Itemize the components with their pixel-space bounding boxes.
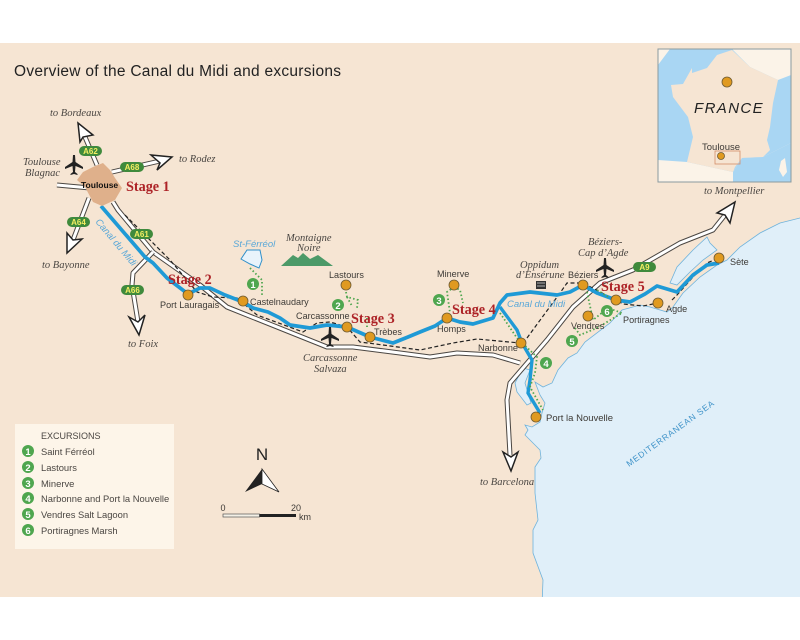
scale bar: 0 (220, 503, 226, 513)
italic destination labels: Montaigne (285, 233, 332, 244)
excursion number badges: 5 (569, 337, 575, 348)
italic destination labels: Noire (296, 243, 321, 254)
italic destination labels: Carcassonne (303, 353, 358, 364)
excursion number badges: 2 (335, 301, 341, 312)
legend: excursions (15, 424, 174, 549)
italic destination labels: Blagnac (25, 168, 60, 179)
italic destination labels: to Rodez (179, 154, 215, 165)
excursion routes (250, 268, 622, 410)
legend: excursions: Minerve (41, 478, 74, 489)
Thau lagoon (670, 237, 717, 285)
place names: Narbonne (478, 343, 518, 353)
place names: Agde (666, 304, 687, 314)
stage labels: Stage 3 (351, 311, 395, 327)
icon: Toulouse Blagnac airport (65, 155, 83, 175)
north arrow (245, 445, 279, 492)
lake Saint Ferreol (241, 250, 262, 268)
stage labels: Stage 2 (168, 272, 212, 288)
icon: Montagne Noire mountains (281, 253, 333, 266)
railway (125, 215, 719, 350)
legend: excursions: 4 (25, 494, 31, 505)
scale bar (220, 503, 311, 522)
icon: Carcassonne airport (321, 327, 339, 347)
inset map of France: Toulouse (702, 142, 740, 153)
Bages lagoon (515, 368, 531, 405)
road shields (67, 146, 656, 295)
bottom page margin (0, 597, 800, 640)
legend: excursions: Narbonne and Port la Nouvelle (41, 493, 169, 504)
place names: Homps (437, 324, 466, 334)
place names: Lastours (329, 270, 364, 280)
place names: Vendres (571, 321, 605, 331)
legend: excursions: 1 (25, 447, 31, 458)
legend: excursions: 5 (25, 510, 31, 521)
stage labels (126, 179, 645, 327)
place names: Carcassonne (296, 311, 350, 321)
place names: Portiragnes (623, 315, 670, 325)
water labels: MEDITERRANEAN SEA (624, 398, 716, 469)
italic destination labels: Oppidum (520, 260, 560, 271)
excursion number badges (247, 278, 613, 370)
excursion number badges: 6 (604, 307, 610, 318)
italic destination labels: d’Ensérune (516, 270, 565, 281)
scale bar: 20 (291, 503, 301, 513)
canal branch to Port la Nouvelle (500, 307, 540, 413)
italic destination labels: Salvaza (314, 364, 347, 375)
place names (160, 257, 749, 424)
italic destination labels: to Bordeaux (50, 108, 102, 119)
stage labels: Stage 1 (126, 179, 170, 195)
italic destination labels: to Barcelona (480, 477, 534, 488)
place names: Port la Nouvelle (546, 413, 613, 424)
italic destination labels: to Montpellier (704, 186, 765, 197)
water labels: St-Férréol (233, 239, 276, 250)
excursion number badges: 3 (436, 296, 442, 307)
legend: excursions: Portiragnes Marsh (41, 525, 118, 536)
water labels: Canal du Midi (93, 217, 139, 269)
stage labels: Stage 5 (601, 279, 645, 295)
place names: Minerve (437, 269, 469, 279)
town markers (183, 253, 724, 422)
road arrowheads (67, 123, 735, 471)
legend: excursions: 2 (25, 463, 31, 474)
road shields: A61 (134, 230, 149, 239)
road shields: A64 (71, 218, 86, 227)
place names: Castelnaudary (250, 297, 309, 307)
Toulouse city: Toulouse (81, 180, 118, 190)
place names: Béziers (568, 270, 599, 280)
road shields: A62 (83, 147, 98, 156)
legend: excursions: Vendres Salt Lagoon (41, 509, 128, 520)
legend: excursions: 6 (25, 526, 31, 537)
motorways (57, 137, 725, 455)
place names: Trèbes (374, 327, 402, 337)
place names: Sète (730, 257, 749, 267)
Canal du Midi (101, 206, 719, 343)
excursion number badges: 1 (250, 280, 256, 291)
road shields: A68 (125, 163, 140, 172)
inset map of France (658, 49, 791, 182)
italic destination labels: to Foix (128, 339, 158, 350)
italic destination labels: to Bayonne (42, 260, 90, 271)
excursion number badges: 4 (543, 359, 549, 370)
water labels: Canal du Midi (507, 299, 566, 310)
legend: excursions: Lastours (41, 462, 77, 473)
inset map of France: FRANCE (694, 100, 764, 117)
legend: excursions: EXCURSIONS (41, 431, 101, 441)
water labels (93, 217, 716, 469)
stage labels: Stage 4 (452, 302, 496, 318)
icon: Beziers airport (596, 258, 614, 278)
scale bar: km (299, 512, 311, 522)
road shields: A66 (125, 286, 140, 295)
Mediterranean sea (525, 216, 800, 605)
north arrow: N (256, 445, 268, 464)
Toulouse city (77, 163, 122, 206)
italic destination labels: Toulouse (23, 157, 61, 168)
italic destination labels (23, 108, 765, 488)
italic destination labels: Béziers- (588, 237, 623, 248)
place names: Port Lauragais (160, 300, 220, 310)
icon: Oppidum d'Enserune (536, 281, 546, 289)
title: Overview of the Canal du Midi and excursions (14, 63, 341, 80)
italic destination labels: Cap d’Agde (578, 248, 629, 259)
legend: excursions: Saint Férréol (41, 446, 95, 457)
legend: excursions: 3 (25, 479, 31, 490)
road shields: A9 (639, 263, 650, 272)
